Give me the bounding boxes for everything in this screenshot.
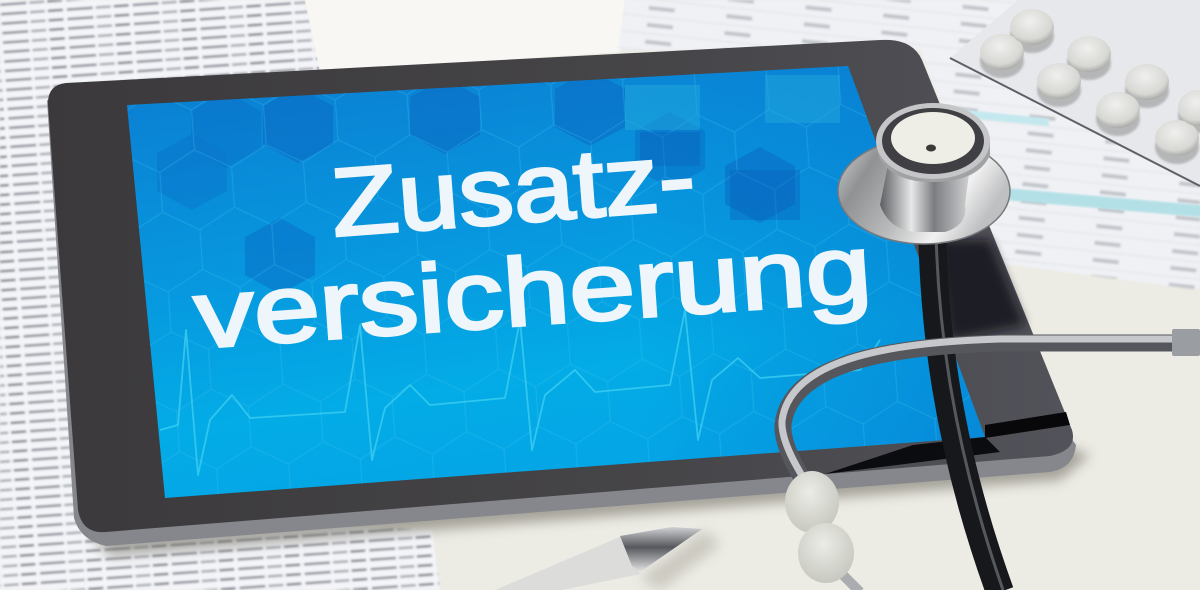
stethoscope (782, 103, 1200, 590)
teal squares top right (625, 75, 840, 130)
ear tip beads (785, 471, 839, 533)
title text: Zusatz-versicherung (191, 123, 875, 369)
pen tip (620, 527, 702, 572)
screen (127, 66, 985, 498)
heading line 2: versicherung (191, 215, 875, 369)
chest piece: bell head (876, 140, 990, 182)
chest piece: stem (880, 165, 970, 232)
binaural: metal arc (783, 343, 1200, 488)
tablet (47, 40, 1090, 556)
heading line 1: Zusatz- (328, 123, 699, 257)
paper: printed text left (0, 0, 440, 590)
paper: table document right (618, 0, 1200, 290)
pen (495, 527, 720, 590)
chest piece: diaphragm disc (838, 138, 1010, 244)
dark hexagons (157, 70, 795, 294)
tablet cast shadow (90, 445, 1090, 556)
tablet metal edge (47, 100, 1076, 546)
lower metal stem (838, 570, 860, 590)
paper: blank middle (305, 0, 625, 72)
blister pack with pills (950, 0, 1200, 186)
tube: black vertical (932, 228, 1000, 590)
hexagon grid (120, 60, 1000, 510)
tablet body (48, 40, 1073, 532)
darker right side of screen (735, 76, 985, 454)
dark reflection on right bezel (935, 240, 1025, 340)
pen barrel (495, 536, 640, 590)
ECG line (160, 310, 880, 475)
pen shadow (640, 530, 720, 590)
black reflection lower right of screen (825, 437, 1000, 474)
